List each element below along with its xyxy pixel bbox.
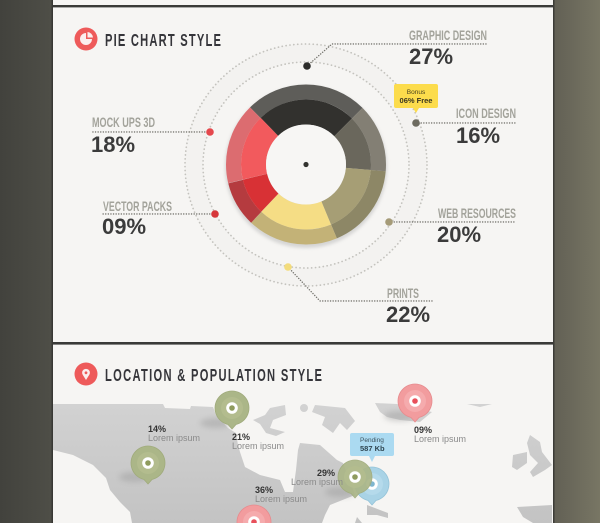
label: 14%: 14% bbox=[148, 424, 166, 434]
callout: bonus tag bbox=[394, 84, 438, 113]
pin: 14% green bbox=[119, 446, 165, 484]
callout: pending: 587 Kb bbox=[360, 444, 385, 453]
segment: prints 22% bbox=[234, 92, 378, 237]
callout: pending bbox=[350, 433, 394, 462]
pin: pending blue bbox=[355, 467, 389, 505]
label: 36%: 36% bbox=[255, 485, 273, 495]
icon: pie heading bbox=[74, 28, 98, 50]
callout: graphic design 27%: 27% bbox=[409, 44, 453, 69]
callout: icon design 16% bbox=[412, 105, 516, 148]
callout: prints 22% bbox=[284, 263, 432, 327]
rings around donut bbox=[185, 44, 427, 286]
heading: pie chart style: PIE CHART STYLE bbox=[105, 30, 221, 51]
panel: location and population style bbox=[53, 342, 553, 523]
label: 29%: Lorem ipsum bbox=[291, 477, 343, 487]
callout: web resources 20%: WEB RESOURCES bbox=[438, 205, 516, 221]
callout: icon design 16%: 16% bbox=[456, 123, 500, 148]
callout: web resources 20% bbox=[385, 205, 516, 247]
callout: bonus tag: Bonus bbox=[407, 89, 426, 96]
label: 14%: Lorem ipsum bbox=[148, 433, 200, 443]
label: 29%: 29% bbox=[317, 468, 335, 478]
label: 21%: 21% bbox=[232, 432, 250, 442]
callout: vector packs 09% bbox=[102, 198, 219, 239]
callout: prints 22%: PRINTS bbox=[387, 285, 419, 301]
callout: bonus tag: 06% Free bbox=[400, 96, 432, 105]
pin: 09% red bbox=[384, 384, 432, 422]
label: 09%: Lorem ipsum bbox=[414, 434, 466, 444]
label: 21%: Lorem ipsum bbox=[232, 441, 284, 451]
icon: location heading bbox=[74, 362, 98, 386]
callout: mock ups 18% bbox=[91, 114, 214, 157]
segment: web resources 20% bbox=[234, 92, 378, 237]
label: 21% bbox=[232, 432, 284, 451]
segment: graphic design 27% bbox=[234, 92, 378, 237]
segment: icon design 16% bbox=[234, 92, 378, 237]
pin: 21% green bbox=[200, 391, 249, 429]
label: 09% bbox=[414, 425, 466, 444]
donut chart bbox=[225, 86, 387, 248]
label: 29% bbox=[291, 468, 343, 487]
pin: 36% red bbox=[237, 505, 271, 523]
callout: graphic design 27%: GRAPHIC DESIGN bbox=[409, 27, 487, 43]
heading: location and population style: LOCATION & POPULATION STYLE bbox=[105, 365, 322, 386]
callout: vector packs 09%: VECTOR PACKS bbox=[103, 198, 172, 214]
segment: mock ups 18% bbox=[234, 92, 378, 237]
callout: prints 22%: 22% bbox=[386, 302, 430, 327]
callout: graphic design 27% bbox=[303, 27, 488, 70]
callout: mock ups 18%: 18% bbox=[91, 132, 135, 157]
callout: mock ups 18%: MOCK UPS 3D bbox=[92, 114, 155, 130]
segment: vector packs 09% bbox=[234, 92, 378, 237]
callout: icon design 16%: ICON DESIGN bbox=[456, 105, 516, 121]
map bbox=[53, 403, 552, 523]
label: 14% bbox=[148, 424, 200, 443]
label: 36% bbox=[255, 485, 307, 504]
callout: pending: Pending bbox=[360, 437, 384, 444]
pin: 29% green bbox=[325, 460, 372, 498]
label: 36%: Lorem ipsum bbox=[255, 494, 307, 504]
callout: web resources 20%: 20% bbox=[437, 222, 481, 247]
label: 09%: 09% bbox=[414, 425, 432, 435]
callout: vector packs 09%: 09% bbox=[102, 214, 146, 239]
